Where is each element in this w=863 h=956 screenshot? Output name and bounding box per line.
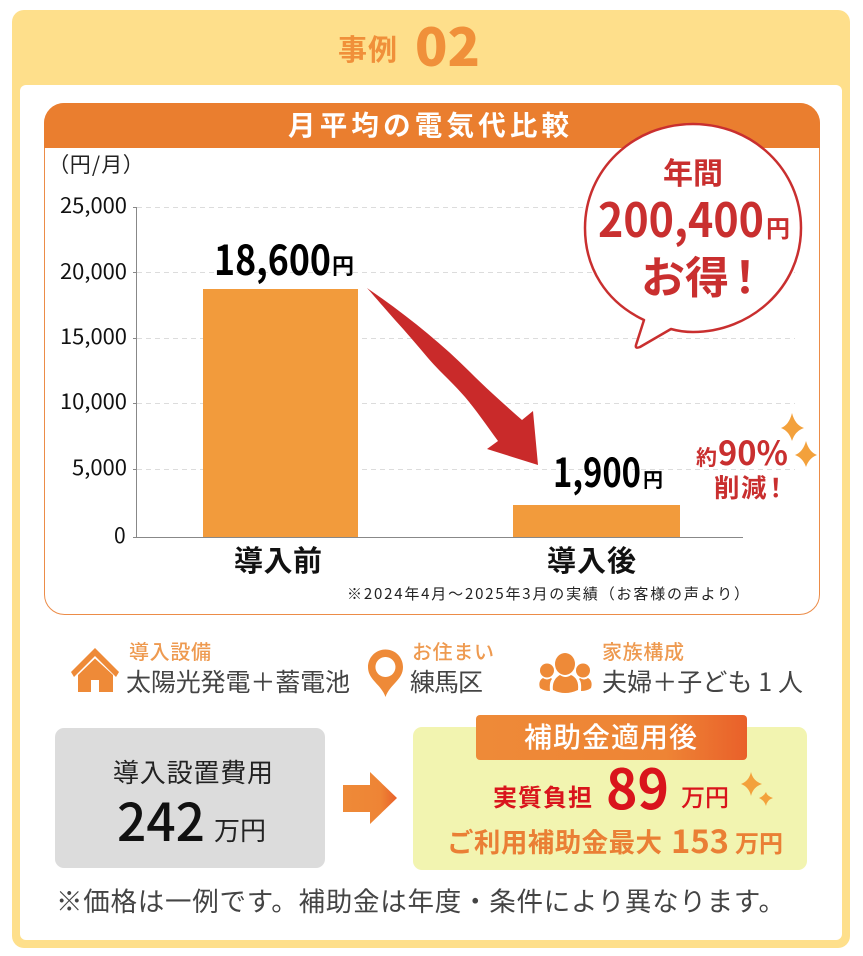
icon: sparkles: [741, 772, 773, 806]
bar: before: [203, 289, 358, 537]
panel: installation cost: 導入設置費用: [113, 753, 273, 790]
subsidy amount: ご利用補助金最大: [447, 821, 662, 860]
info: family: [539, 636, 803, 699]
title: [338, 6, 480, 81]
y axis labels: 0: [114, 520, 126, 550]
panel: installation cost: [55, 728, 325, 868]
effective cost: 万円: [681, 778, 729, 813]
icon: sparkles: [781, 413, 817, 467]
subsidy amount: 153: [671, 817, 729, 863]
callout: reduction: 90%: [718, 427, 788, 475]
info: equipment: 太陽光発電＋蓄電池: [126, 663, 350, 699]
axis unit: （円/月）: [58, 149, 134, 179]
y axis labels: 10,000: [60, 386, 127, 416]
callout: reduction: 約: [696, 442, 717, 472]
panel heading: [44, 103, 820, 148]
bar chart: [58, 149, 795, 580]
y axis labels: 20,000: [60, 256, 127, 286]
callout: reduction: [696, 427, 789, 505]
callout: savings: 年間: [663, 149, 723, 193]
info: residence: [368, 636, 494, 699]
value: before: 18,600: [214, 227, 331, 287]
info: family: 家族構成: [602, 636, 684, 665]
y axis labels: 5,000: [72, 452, 127, 482]
panel heading: 月平均の電気代比較: [288, 103, 569, 143]
info: equipment: 導入設備: [129, 636, 211, 665]
subsidy amount: 万円: [735, 824, 783, 859]
footnote: ※2024年4月～2025年3月の実績（お客様の声より）: [347, 583, 749, 604]
badge: 補助金適用後: [524, 716, 697, 756]
icon: house: [71, 648, 119, 692]
subsidy amount: [447, 817, 783, 863]
bar: after: [513, 505, 680, 537]
panel: chart: [44, 103, 820, 614]
icon: people: [539, 653, 592, 693]
badge: [476, 715, 747, 760]
value: before: 円: [332, 249, 354, 281]
callout: savings: 200,400: [598, 182, 764, 251]
arrow: down: [367, 288, 538, 465]
arrow: to subsidy: [343, 772, 397, 824]
effective cost: [493, 745, 729, 825]
icon: map pin: [368, 650, 403, 697]
callout: savings: [585, 124, 801, 348]
title: 事例: [338, 27, 397, 69]
info: residence: お住まい: [412, 636, 494, 665]
info: family: 夫婦＋子ども 1 人: [602, 663, 803, 699]
info: equipment: [71, 636, 350, 699]
y axis labels: [60, 190, 127, 550]
effective cost: 実質負担: [493, 778, 592, 813]
value: after: 1,900: [553, 441, 641, 499]
callout: savings: お得！: [641, 242, 767, 306]
panel: installation cost: 万円: [214, 811, 266, 848]
callout: savings: 円: [766, 209, 790, 244]
y axis labels: 25,000: [60, 190, 127, 220]
value: after: 円: [643, 464, 663, 493]
callout: reduction: 削減！: [714, 468, 789, 505]
effective cost: 89: [606, 745, 669, 825]
title: 02: [415, 6, 480, 81]
category: after: 導入後: [547, 538, 636, 580]
panel: installation cost: 242: [117, 781, 205, 856]
category: before: 導入前: [234, 538, 322, 580]
y axis labels: 15,000: [60, 321, 127, 351]
info: residence: 練馬区: [410, 663, 483, 699]
panel: after subsidy: [413, 715, 807, 870]
panel frame: [44, 104, 820, 614]
footer note: ※価格は一例です。補助金は年度・条件により異なります。: [56, 880, 785, 919]
